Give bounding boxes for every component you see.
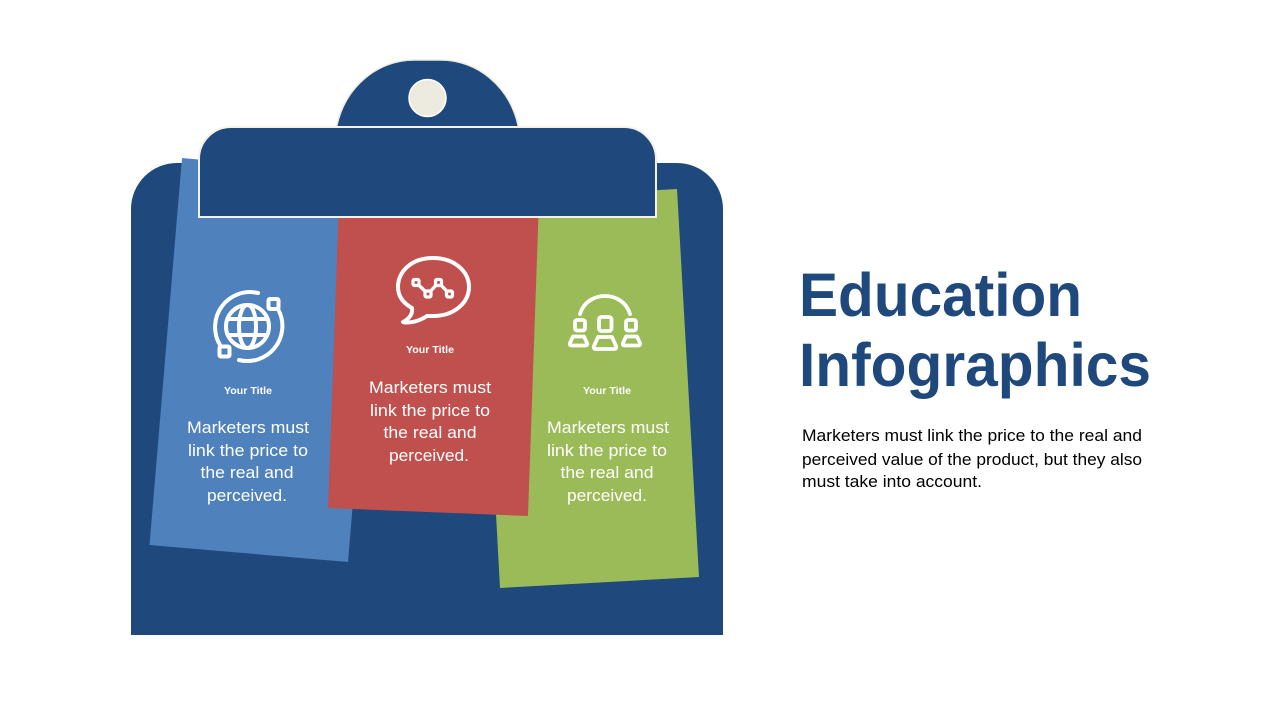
clipboard board <box>131 163 723 635</box>
card text: blue: the real and <box>200 464 294 482</box>
card text: blue: perceived. <box>207 487 287 505</box>
panel: blue note <box>150 158 380 562</box>
panel: red note <box>328 200 539 516</box>
title <box>799 261 1151 399</box>
card text: blue: Marketers must <box>187 419 309 437</box>
description text: perceived value of the product, but they also <box>802 451 1142 469</box>
clipboard clip bar <box>199 127 656 217</box>
description text: Marketers must link the price to the real and <box>802 427 1142 445</box>
card title: green: Your Title <box>583 385 631 397</box>
card text: green: Marketers must <box>547 419 669 437</box>
card text: blue <box>187 419 309 505</box>
card text: red: Marketers must <box>369 379 491 397</box>
card title: blue: Your Title <box>224 385 272 397</box>
panel: green note <box>479 189 699 588</box>
clipboard clip top <box>336 60 518 127</box>
description text <box>802 427 1142 491</box>
icon: people group <box>570 296 640 349</box>
card text: red: the real and <box>384 424 476 442</box>
clip hole <box>409 80 446 116</box>
card text: red: perceived. <box>389 447 469 465</box>
card title: red: Your Title <box>406 344 454 356</box>
card text: green: the real and <box>560 464 654 482</box>
card text: green: perceived. <box>567 487 647 505</box>
icon: globe <box>215 292 282 361</box>
icon: speech bubble <box>398 258 469 323</box>
title: Education <box>799 261 1082 329</box>
card text: blue: link the price to <box>188 442 308 460</box>
card text: green <box>547 419 669 505</box>
card text: red: link the price to <box>370 402 490 420</box>
title: Infographics <box>799 331 1151 399</box>
card text: red <box>369 379 491 465</box>
card text: green: link the price to <box>547 442 667 460</box>
description text: must take into account. <box>802 473 982 491</box>
